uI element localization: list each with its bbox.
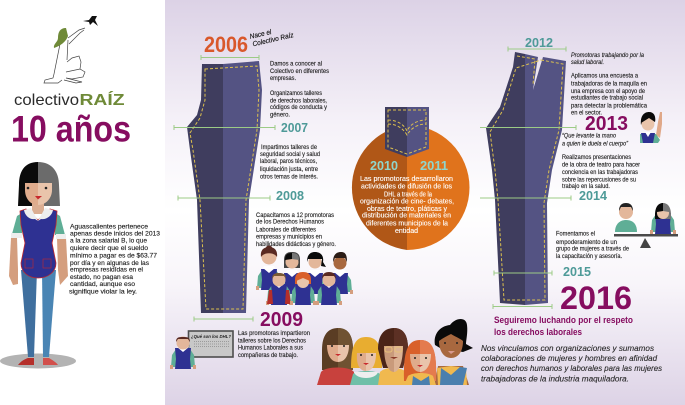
text block: 2006: Colectivo en diferentes (270, 68, 330, 75)
text block: 2008: Laborales de diferentes (256, 226, 317, 234)
right jeans leg (486, 52, 566, 305)
text block: salario: quiere decir que el sueldo (70, 245, 148, 252)
text block: 2012: Promotoras trabajando por la (571, 52, 644, 59)
text block: 2016: con derechos humanos y laborales para las mujeres (481, 364, 662, 373)
left jeans leg (187, 61, 262, 313)
text block: 2010-2011: diferentes municipios de la (366, 220, 448, 228)
text block: salario: apenas desde inicios del 2013 (70, 230, 160, 238)
text block: 2006: empresas. (270, 75, 296, 82)
illustration: speaker and board (170, 331, 233, 369)
text block: 2013: conciencia en las trabajadoras (562, 169, 639, 176)
heading: seguiremo luchando: los derechos laborales (494, 327, 582, 338)
text block: 2006: Organizamos talleres (270, 90, 323, 97)
heading: seguiremo luchando (494, 315, 633, 338)
text block: salario: signifique violar la ley. (69, 288, 137, 296)
year 2014: 2014 (579, 188, 608, 203)
text block: 2016: trabajadoras de la industria maquiladora. (481, 374, 629, 384)
text block: salario: empresas residídas en el (70, 266, 144, 274)
board: ¿Qué son los DHL? (191, 334, 231, 339)
text block: 2006: de derechos laborales, (270, 98, 327, 104)
year 2010: 2010 (370, 158, 398, 173)
text block: 2008: habilidades didácticas y género. (256, 241, 336, 248)
woman with glasses (650, 203, 676, 234)
text block: 2006: Damos a conocer al (270, 60, 322, 68)
text block: salario (69, 224, 160, 296)
text block: 2009 (238, 330, 310, 359)
text block: 2012: estudiantes de trabajo social (571, 94, 643, 102)
text block: salario: por día y en algunas de las (70, 260, 150, 267)
text block: 2006: género. (270, 112, 290, 118)
text block: 2010-2011: Las promotoras desarrollaron (360, 176, 453, 183)
background panel (165, 0, 685, 405)
logo: colectivo RAIZ (14, 16, 125, 109)
text block: 2010-2011: distribución de materiales en (362, 212, 451, 220)
text block: 2009: Las promotoras impartieron (238, 330, 310, 337)
circle: 2010 2011 (352, 107, 470, 250)
woman three (378, 328, 408, 385)
text block: 2006 (270, 60, 330, 118)
heading: seguiremo luchando: Seguiremo luchando por el respeto (494, 315, 633, 326)
text block: salario: cantidad, aunque eso (70, 281, 135, 288)
text block: 2016 (481, 344, 662, 384)
text block: 2012: salud laboral. (571, 59, 604, 66)
text block: salario: mínimo a pagar es de $63.77 (70, 252, 157, 260)
text block: 2010-2011 (360, 176, 454, 235)
text block: 2009: Humanos Laborales a sus (238, 344, 304, 352)
text block: 2010-2011: organización de cine- debates, (360, 198, 454, 206)
quote: “Que levante la mano (562, 132, 616, 140)
woman five (434, 319, 473, 385)
year 2008: 2008 (276, 188, 304, 203)
year 2015: 2015 (563, 264, 591, 279)
text block: 2008: Capacitamos a 12 promotoras (256, 212, 335, 219)
text block: 2014: empoderamiento de un (556, 239, 617, 246)
text block: 2010-2011: DHL a través de la (384, 192, 432, 198)
icon: seated figure with bird (44, 16, 98, 83)
text block: 2006: códigos de conducta y (270, 104, 328, 111)
text block: 2008 (256, 212, 336, 248)
text block: salario: Aguascalientes pertenece (70, 224, 148, 230)
text block: 2010-2011: entidad (395, 228, 418, 235)
text block: 2007: liquidación justa, entre (260, 166, 318, 173)
text block: 2012: una empresa con el apoyo de (571, 88, 645, 95)
text block: 2007: otros temas de interés. (260, 174, 318, 180)
text block: 2010-2011: obras de teatro, pláticas y (367, 206, 447, 213)
caption: nace el colectivo (249, 24, 295, 49)
year 2016: 2016 (560, 280, 632, 316)
text block: 2013: trabajo en la salud. (562, 183, 610, 190)
woman two (350, 337, 382, 385)
text block: 2014: grupo de mujeres a través de (556, 246, 629, 252)
illustration: twelve promoters group (256, 246, 353, 305)
year 2012: 2012 (525, 35, 553, 50)
year 2011: 2011 (420, 158, 448, 173)
text block: 2014 (556, 230, 629, 260)
text block: 2009: compañeras de trabajo. (238, 352, 298, 359)
text block: 2012: trabajadoras de la maquila en (571, 80, 647, 88)
caption: nace el colectivo: Colectivo Raíz (252, 32, 295, 48)
title: 10 años: 10 años (11, 108, 131, 150)
woman one (317, 328, 354, 385)
quote: a quien le duela el cuerpo” (562, 140, 629, 148)
text block: 2016: colaboraciones de mujeres y hombres en afinidad (481, 354, 658, 363)
text block: salario: estado, no pagan esa (70, 274, 133, 281)
text block: 2008: de los Derechos Humanos (256, 218, 325, 226)
text block: salario: a la zona salarial B, lo que (70, 238, 147, 244)
icon: jeans pocket (385, 107, 429, 157)
quote (562, 132, 629, 148)
text block: 2009: talleres sobre los Derechos (238, 338, 307, 344)
illustration: worker woman (0, 162, 76, 368)
year 2006: 2006 (204, 32, 248, 57)
year 2009: 2009 (260, 309, 303, 331)
text block: 2012: para detectar la problemática (571, 102, 647, 110)
logo wordmark: colectivo (14, 92, 79, 109)
text block: 2007: seguridad social y salud (260, 151, 320, 158)
year 2007: 2007 (281, 120, 308, 135)
text block: 2012: en el sector. (571, 110, 602, 116)
illustration: girl raising hand (640, 112, 662, 143)
text block: 2013: Realizamos presentaciones (562, 154, 632, 161)
small speaker (170, 336, 196, 369)
text block: 2007: laboral, paros técnicos, (260, 158, 317, 165)
text block: 2016: Nos vinculamos con organizaciones y sumamos (481, 344, 654, 353)
text block: 2008: empresas y municipios en (256, 234, 322, 240)
text block: 2014: la capacitación y asesoría. (556, 253, 622, 260)
logo: colectivo RAIZ: RAÍZ (80, 90, 125, 109)
year 2013: 2013 (585, 113, 628, 135)
text block: 2013: de la obra de teatro para hacer (562, 162, 641, 168)
year 2006 (204, 24, 295, 57)
text block: 2007: Impartimos talleres de (261, 144, 317, 151)
man (615, 203, 637, 232)
text block: 2013 (562, 154, 641, 190)
illustration: equality scale (614, 203, 678, 248)
text block: 2012 (571, 52, 647, 116)
text block: 2010-2011: actividades de difusión de los (361, 184, 452, 190)
illustration: group of five women (317, 319, 473, 385)
text block: 2013: sobre las repercusiones de su (562, 176, 636, 184)
caption: nace el colectivo: Nace el (249, 29, 273, 41)
text block: 2007 (260, 144, 320, 180)
text block: 2014: Fomentamos el (556, 230, 595, 238)
woman four (404, 340, 436, 385)
text block: 2012: Aplicamos una encuesta a (571, 72, 638, 80)
